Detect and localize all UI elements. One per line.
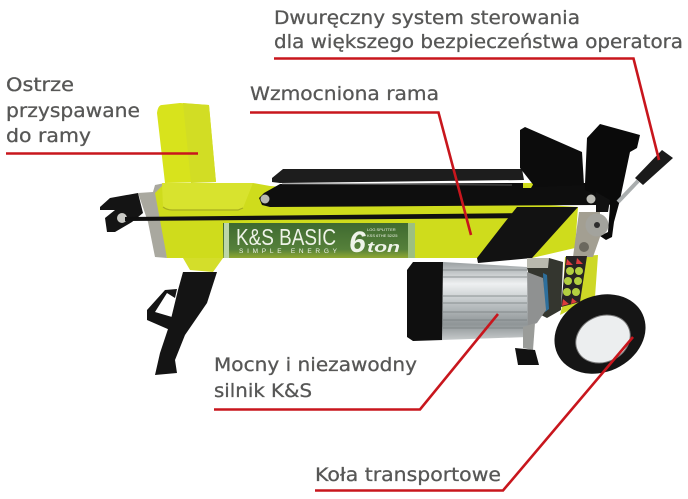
callout: control system: Dwuręczny system sterowania [274, 7, 580, 29]
main beam [155, 183, 578, 258]
callout: wheels [315, 337, 633, 490]
control lever [618, 150, 673, 202]
hydraulic rod [125, 213, 535, 221]
decal panel: KSS 6THE 52/25 [367, 233, 398, 238]
callout: wheels: Koła transportowe [315, 464, 501, 486]
hand wheel and bolt [586, 194, 608, 236]
rear leg with handle [147, 258, 223, 375]
steel bracket plate [573, 212, 600, 257]
lower yellow bracket [560, 255, 598, 315]
log table [272, 169, 524, 183]
callout: control system [274, 7, 683, 160]
blade [157, 103, 216, 183]
callout: motor [214, 314, 498, 410]
callout: control system: dla większego bezpieczeństwa operatora [274, 31, 683, 53]
weld pad [162, 183, 253, 210]
electric motor [407, 258, 563, 365]
callout: blade [6, 74, 198, 154]
transport wheel [541, 280, 659, 388]
side rail [259, 183, 598, 207]
callout: motor: Mocny i niezawodny [214, 354, 417, 376]
callout: motor: silnik K&S [214, 380, 312, 402]
decal panel [223, 223, 415, 259]
callout: reinforced frame [250, 83, 471, 235]
right ear [585, 124, 640, 240]
safety stickers [561, 256, 587, 307]
log splitter machine [100, 103, 673, 388]
steel end plate [138, 183, 167, 258]
callout: blade: do ramy [6, 125, 91, 147]
black diagonal support [477, 207, 578, 263]
callout: blade: przyspawane [6, 100, 140, 122]
decal panel: LOG SPLITTER [367, 227, 396, 232]
decal panel: ton [367, 239, 400, 256]
rod end fitting [100, 193, 143, 232]
decal panel: 6 [349, 226, 366, 259]
callout: blade: Ostrze [6, 74, 74, 96]
callout: reinforced frame: Wzmocniona rama [250, 83, 439, 105]
decal panel: K&S BASIC [236, 224, 336, 250]
left ear [520, 127, 584, 187]
decal panel: SIMPLE ENERGY [239, 248, 338, 255]
